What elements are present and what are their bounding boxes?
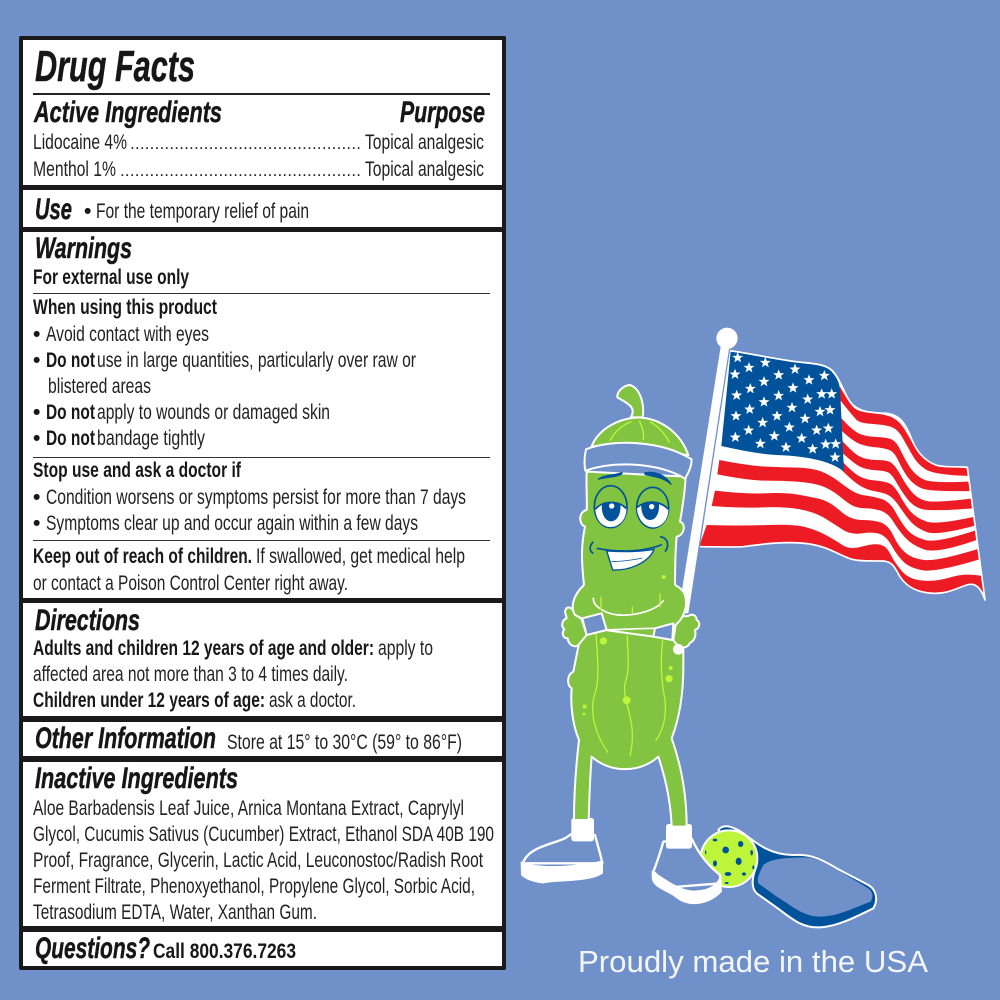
text block: stop use: Stop use and ask a doctor if — [33, 459, 242, 482]
ingredient row: lidocaine: Topical analgesic — [365, 131, 484, 154]
headband — [585, 443, 692, 479]
panel: directions: Directions — [35, 604, 140, 637]
pickleball paddle — [718, 826, 876, 927]
cap dome — [592, 417, 688, 455]
text block: when using this product — [33, 296, 416, 450]
pickle body — [568, 385, 692, 827]
body ridges — [593, 633, 665, 756]
ingredient row: menthol: Topical analgesic — [365, 158, 484, 181]
panel: questions — [23, 932, 502, 966]
text block: stop use — [33, 459, 466, 535]
cheek spot — [662, 575, 666, 579]
text block: when using this product: • — [33, 427, 40, 450]
heading: purpose: Purpose — [400, 96, 485, 129]
left eye — [594, 486, 627, 528]
panel: warnings — [23, 232, 502, 598]
left cuff — [582, 613, 607, 635]
panel: inactive ingredients: Inactive Ingredients — [35, 762, 238, 795]
flag — [697, 351, 990, 607]
text block: when using this product: • — [33, 349, 40, 372]
flag outline — [700, 351, 985, 600]
text block: when using this product: • — [33, 401, 40, 424]
body silhouette — [568, 472, 687, 827]
illustration: pickle mascot with flag — [521, 328, 990, 927]
right eye — [637, 487, 669, 528]
panel: active ingredients — [23, 40, 502, 185]
left sneaker — [521, 818, 603, 883]
ingredient row: menthol — [33, 158, 484, 181]
panel: other information: Store at 15° to 30°C (59° to 86°F) — [227, 731, 462, 754]
panel: other information — [23, 722, 502, 756]
panel: inactive ingredients: Aloe Barbadensis Leaf Juice, Arnica Montana Extract, Caprylyl — [33, 797, 464, 820]
text block: keep out of reach: If swallowed, get medical help — [256, 545, 465, 568]
pickleball — [701, 830, 757, 887]
text block: when using this product: Do not — [46, 349, 95, 372]
text block: stop use: • — [33, 486, 40, 509]
stem — [617, 385, 643, 417]
panel: use: For the temporary relief of pain — [96, 200, 309, 223]
red stripes — [697, 387, 990, 607]
text block: keep out of reach — [33, 545, 465, 595]
heading: active ingredients: Active Ingredients — [33, 96, 222, 129]
forearm crease — [593, 598, 663, 630]
panel: inactive ingredients: Proof, Fragrance, Glycerin, Lactic Acid, Leuconostoc/Radish Root — [33, 849, 483, 872]
canton — [721, 352, 844, 472]
arms and hands — [562, 585, 699, 655]
ingredient row: lidocaine: Lidocaine 4% — [33, 131, 127, 154]
pole end — [673, 644, 684, 655]
ingredient row: lidocaine: ............................................... — [130, 134, 361, 153]
right cuff — [653, 623, 673, 640]
left hand — [562, 607, 587, 646]
text block: keep out of reach: or contact a Poison Control Center right away. — [33, 572, 348, 595]
folded arms — [573, 585, 686, 637]
panel: questions: Call 800.376.7263 — [153, 940, 296, 963]
text block: when using this product: use in large quantities, particularly over raw or — [97, 349, 416, 372]
panel: other information: Other Information — [35, 722, 216, 755]
body spots — [583, 637, 673, 715]
text block: when using this product: • — [33, 323, 40, 346]
stars — [729, 352, 841, 462]
text block: when using this product: apply to wounds or damaged skin — [97, 401, 330, 424]
panel: use: Use — [35, 193, 72, 226]
panel: directions: ask a doctor. — [269, 689, 356, 712]
ingredient row: lidocaine — [33, 131, 484, 154]
text block: stop use: Symptoms clear up and occur again within a few days — [46, 512, 418, 535]
caption: Proudly made in the USA — [578, 944, 928, 979]
panel: directions — [23, 603, 502, 716]
text block: when using this product: Do not — [46, 427, 95, 450]
drug facts label — [19, 36, 506, 970]
text block: stop use: Condition worsens or symptoms persist for more than 7 days — [46, 486, 466, 509]
panel: inactive ingredients: Glycol, Cucumis Sativus (Cucumber) Extract, Ethanol SDA 40B 190 — [33, 823, 494, 846]
panel: directions: affected area not more than 3 to 4 times daily. — [33, 663, 348, 686]
panel: directions: apply to — [378, 637, 433, 660]
face — [590, 472, 671, 570]
right hand — [673, 615, 699, 647]
text block: when using this product: blistered areas — [48, 375, 151, 398]
panel: questions: Questions? — [35, 932, 150, 965]
text block: when using this product: When using this product — [33, 296, 217, 319]
panel: inactive ingredients: Ferment Filtrate, Phenoxyethanol, Propylene Glycol, Sorbic Acid, — [33, 875, 475, 898]
arm ridges — [601, 593, 660, 614]
panel: directions: Children under 12 years of age: — [33, 689, 265, 712]
label frame — [19, 36, 506, 970]
flag pole — [678, 328, 738, 613]
ingredient row: menthol: Menthol 1% — [33, 158, 116, 181]
text block: keep out of reach: Keep out of reach of children. — [33, 545, 252, 568]
paddle, ball and shoes — [521, 818, 876, 927]
panel: use — [23, 190, 502, 227]
text block: stop use: • — [33, 512, 40, 535]
ingredient row: menthol: ................................................. — [120, 161, 361, 180]
heading: warnings: Warnings — [35, 232, 132, 265]
panel: warnings: For external use only — [33, 266, 189, 289]
text block: when using this product: Do not — [46, 401, 95, 424]
panel: directions: Adults and children 12 years of age and older: — [33, 637, 374, 660]
right sneaker — [652, 824, 722, 904]
title: Drug Facts — [35, 42, 195, 91]
mouth — [590, 537, 668, 570]
text block: when using this product: Avoid contact with eyes — [46, 323, 209, 346]
eyebrows — [598, 472, 671, 485]
panel: use: • — [84, 200, 91, 223]
panel: inactive ingredients: Tetrasodium EDTA, Water, Xanthan Gum. — [33, 901, 317, 924]
text block: when using this product: bandage tightly — [97, 427, 205, 450]
panel: inactive ingredients — [23, 762, 502, 926]
